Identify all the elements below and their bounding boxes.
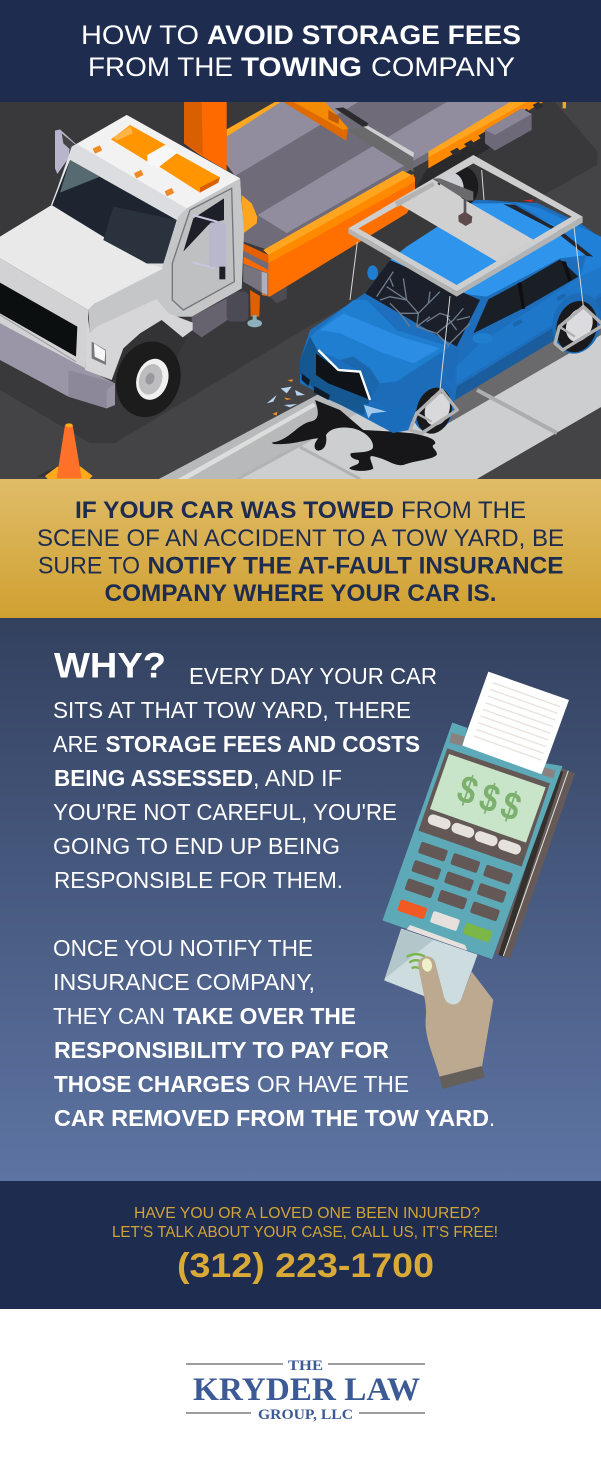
lifting frame with cables and hook xyxy=(348,155,583,390)
windshield with cracks xyxy=(365,260,480,347)
paragraph one: SITS AT THAT TOW YARD, THERE xyxy=(53,697,411,723)
paragraph one: BEING ASSESSED xyxy=(54,765,253,791)
logo: The Kryder Law Group: THE xyxy=(288,1358,323,1374)
footer background xyxy=(0,1309,601,1470)
paragraph one: ARE xyxy=(53,731,98,757)
road curb and sidewalk xyxy=(159,315,601,479)
paragraph two: CAR REMOVED FROM THE TOW YARD xyxy=(54,1105,489,1131)
truck wheel xyxy=(116,342,181,418)
title banner xyxy=(0,0,601,102)
side panels and roof xyxy=(390,199,601,400)
call to action text: HAVE YOU OR A LOVED ONE BEEN INJURED? xyxy=(134,1205,480,1222)
call to action text xyxy=(112,1205,498,1241)
callout text: SURE TO xyxy=(38,552,140,580)
car body xyxy=(300,200,601,433)
paragraph two: THEY CAN xyxy=(53,1003,165,1029)
paragraph two: THOSE CHARGES xyxy=(54,1071,250,1097)
traffic cone xyxy=(37,423,93,482)
paragraph one: GOING TO END UP BEING xyxy=(53,833,340,859)
paragraph two: RESPONSIBILITY TO PAY FOR xyxy=(54,1037,389,1063)
callout text: FROM THE xyxy=(401,497,526,524)
tow truck bed xyxy=(184,100,513,317)
paragraph two xyxy=(53,935,495,1131)
logo: The Kryder Law Group: KRYDER LAW xyxy=(193,1372,420,1408)
illustration: tow truck lifting damaged car xyxy=(0,100,601,482)
icon: dollar signs: $ xyxy=(495,782,527,830)
icon: receipt xyxy=(462,672,569,775)
icon: dollar signs: $ xyxy=(452,766,484,814)
paragraph two: OR HAVE THE xyxy=(257,1071,409,1097)
logo: The Kryder Law Group: GROUP, LLC xyxy=(258,1407,353,1423)
icon: hand holding card xyxy=(385,929,493,1089)
crane arm, boom and right rail xyxy=(280,100,566,207)
paragraph two: ONCE YOU NOTIFY THE xyxy=(53,935,313,961)
paragraph one: STORAGE FEES AND COSTS xyxy=(106,731,420,757)
roof light bar xyxy=(93,125,220,196)
call to action text: LET’S TALK ABOUT YOUR CASE, CALL US, IT’S FREE! xyxy=(112,1224,498,1241)
front wheel with dolly xyxy=(408,388,459,435)
contact banner xyxy=(0,1181,601,1309)
truck ground shadow xyxy=(0,102,598,443)
crumpled hood and bumper xyxy=(300,300,450,422)
why heading: WHY? xyxy=(54,646,166,686)
icon: dollar signs xyxy=(452,766,527,830)
paragraph one: EVERY DAY YOUR CAR xyxy=(189,663,437,689)
paragraph two: INSURANCE COMPANY, xyxy=(53,969,315,995)
callout text xyxy=(37,497,564,607)
paragraph one xyxy=(53,663,437,893)
paragraph two: TAKE OVER THE xyxy=(173,1003,356,1029)
icon: card payment terminal with hand xyxy=(383,672,575,1089)
title heading: FROM THE xyxy=(88,52,233,82)
gold callout band xyxy=(0,479,601,618)
tow truck cab xyxy=(0,115,262,426)
callout text: COMPANY WHERE YOUR CAR IS. xyxy=(104,580,496,607)
title heading: COMPANY xyxy=(371,52,515,82)
explanation panel xyxy=(0,618,601,1181)
icon: dollar signs: $ xyxy=(474,774,506,822)
paragraph one: , AND IF xyxy=(253,765,342,791)
title heading: AVOID STORAGE FEES xyxy=(207,20,521,50)
logo: The Kryder Law Group xyxy=(186,1358,425,1423)
paragraph two: . xyxy=(489,1105,495,1131)
phone number: (312) 223-1700 xyxy=(177,1247,434,1285)
title heading: HOW TO xyxy=(81,20,199,50)
title heading xyxy=(81,20,521,82)
paragraph one: RESPONSIBLE FOR THEM. xyxy=(54,867,343,893)
paragraph one: YOU'RE NOT CAREFUL, YOU'RE xyxy=(53,799,397,825)
oil spill and glass debris xyxy=(267,379,437,471)
callout text: IF YOUR CAR WAS TOWED xyxy=(75,497,394,524)
blue damaged car xyxy=(300,199,601,438)
title heading: TOWING xyxy=(241,52,362,82)
callout text: SCENE OF AN ACCIDENT TO A TOW YARD, BE xyxy=(37,525,564,552)
callout text: NOTIFY THE AT-FAULT INSURANCE xyxy=(148,552,564,580)
rear wheel with dolly xyxy=(552,293,601,354)
